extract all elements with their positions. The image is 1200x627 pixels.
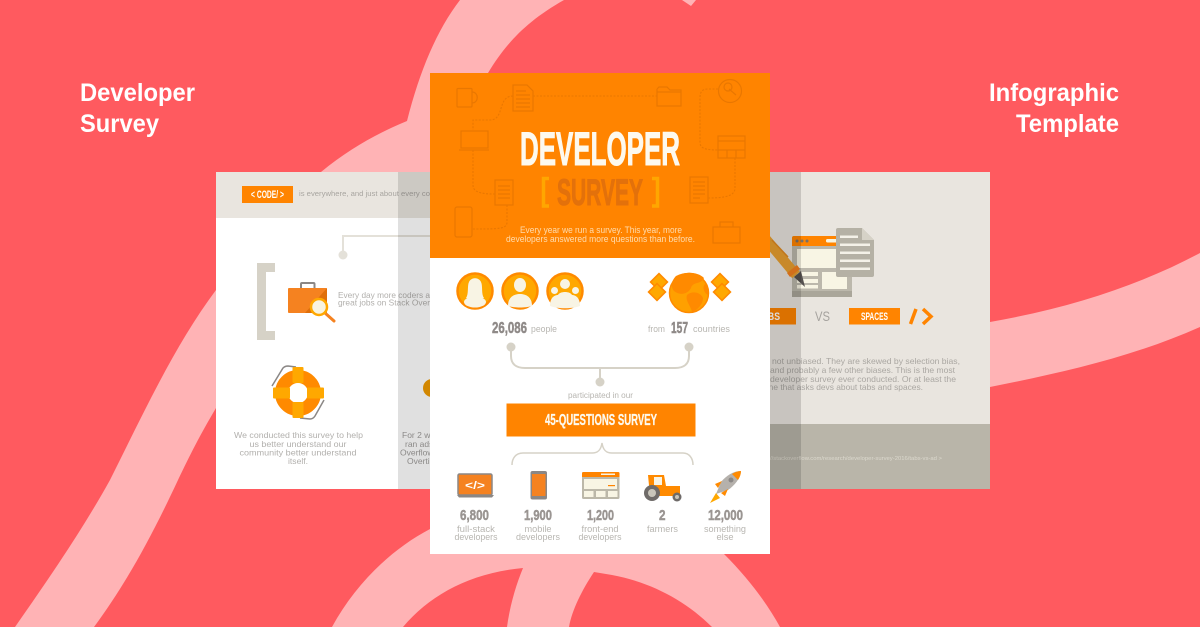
text: bias paragraph: not unbiased. They are skewed by selection bias,: [772, 356, 960, 366]
text: second column, clipped: Overflow: [400, 448, 434, 458]
icon: woman avatar: [458, 274, 492, 308]
banner: 45-questions survey: 45-QUESTIONS SURVEY: [545, 412, 657, 429]
group: front-end developers: 1,200: [587, 507, 614, 524]
text: second column, clipped: [400, 430, 448, 466]
text: survey purpose: itself.: [288, 456, 308, 466]
group: mobile developers: mobile: [524, 524, 552, 535]
group: farmers: [644, 475, 682, 535]
icon: browser window and document: [792, 228, 874, 297]
shadow strip: [398, 172, 430, 489]
icon: globe with satellite panels: [649, 273, 730, 312]
group: farmers: farmers: [647, 524, 678, 535]
text: bias paragraph: [764, 356, 960, 392]
icon: phone: [530, 471, 547, 500]
group: full-stack developers: [454, 474, 498, 543]
banner: 45-questions survey: [506, 404, 696, 436]
icon: laptop: </>: [465, 480, 485, 492]
heading: Infographic Template: Infographic: [989, 79, 1119, 107]
stat: from 157 countries: countries: [693, 324, 730, 335]
text: survey purpose: [234, 430, 363, 466]
text: coders: great jobs on Stack Over: [338, 298, 430, 308]
stat: from 157 countries: 157: [671, 320, 688, 337]
bracket: [257, 263, 275, 340]
tag: spaces: SPACES: [861, 311, 888, 323]
icon: rocket: [710, 471, 741, 503]
text: second column, clipped: For 2 weeks: [402, 430, 448, 440]
text: survey purpose: us better understand our: [250, 439, 347, 449]
text: coders: Every day more coders a: [338, 290, 430, 300]
group: farmers: 2: [659, 507, 666, 524]
icon: briefcase with magnifier: [288, 283, 334, 321]
text: second column, clipped: ran ads: [405, 439, 433, 449]
text: second column, clipped: Overtime: [407, 456, 442, 466]
stat: 26,086 people: 26,086: [492, 320, 527, 337]
group: full-stack developers: developers: [454, 532, 498, 543]
icon: group avatar: [548, 274, 582, 308]
text: survey purpose: We conducted this survey to help: [234, 430, 363, 440]
text: footer url: //stackoverflow.com/research/developer-survey-2016/tabs-vs-ad >: [770, 456, 942, 462]
group: mobile developers: developers: [516, 532, 560, 543]
heading: Infographic Template: [989, 79, 1119, 138]
text: coders: [338, 290, 430, 308]
heading: Infographic Template: Template: [1016, 110, 1119, 138]
panel: right infographic page: [745, 172, 990, 489]
icon: pen: [765, 238, 805, 287]
heading: Developer Survey: Survey: [80, 110, 159, 138]
heading: Developer Survey: Developer: [80, 79, 195, 107]
panel: left infographic page: [216, 172, 448, 489]
tag: tabs: TABS: [757, 311, 780, 323]
icon: orange badge, clipped: [423, 379, 441, 397]
icon: lifebuoy: [272, 366, 324, 419]
icon: browser: [582, 472, 620, 499]
icon: code slash chevron: [910, 309, 931, 324]
group: mobile developers: [516, 471, 560, 543]
connector line: [338, 236, 430, 260]
subtitle: [506, 225, 695, 244]
group: full-stack developers: 6,800: [460, 507, 489, 524]
text: bias paragraph: and probably a few other biases. This is the most: [770, 365, 956, 375]
subtitle: developers answered more questions than before.: [506, 234, 695, 244]
text: participated in our: participated in our: [568, 391, 633, 400]
intro text: is everywhere, and just about every co: [299, 189, 430, 198]
title: DEVELOPER: DEVELOPER: [520, 122, 680, 175]
group: something else: else: [716, 532, 734, 543]
group: front-end developers: developers: [578, 532, 622, 543]
code tag: [242, 186, 293, 203]
subtitle: Every year we run a survey. This year, more: [520, 225, 682, 235]
text: survey purpose: community better understand: [240, 448, 357, 458]
code tag: < CODE/ >: [251, 189, 284, 201]
group: front-end developers: front-end: [582, 524, 618, 535]
group: mobile developers: 1,900: [524, 507, 552, 524]
shadow strip: [770, 172, 801, 489]
stat: from 157 countries: from: [648, 324, 665, 335]
tag: tabs: [745, 308, 796, 324]
group: something else: [704, 471, 746, 543]
brace: [512, 443, 693, 465]
title brackets: [544, 178, 658, 206]
group: something else: 12,000: [708, 507, 743, 524]
stat: 26,086 people: people: [531, 324, 557, 335]
group: full-stack developers: full-stack: [457, 524, 495, 535]
label: vs: VS: [815, 308, 830, 324]
line icons and dashed links: [455, 80, 745, 243]
header: orange cover: [430, 73, 770, 258]
heading: Developer Survey: [80, 79, 195, 138]
icon: tractor: [644, 475, 682, 502]
tag: spaces: [849, 308, 900, 324]
stat: from 157 countries: [648, 320, 730, 337]
panel: centre infographic page: [430, 73, 770, 554]
icon: man avatar: [502, 274, 538, 308]
group: something else: something: [704, 524, 746, 535]
title: SURVEY: SURVEY: [557, 172, 643, 213]
text: bias paragraph: developer survey ever conducted. Or at least the: [770, 374, 956, 384]
group: front-end developers: [578, 472, 622, 543]
connector: joining stats to survey: [506, 342, 694, 386]
text: bias paragraph: one that asks devs about tabs and spaces.: [764, 382, 923, 392]
